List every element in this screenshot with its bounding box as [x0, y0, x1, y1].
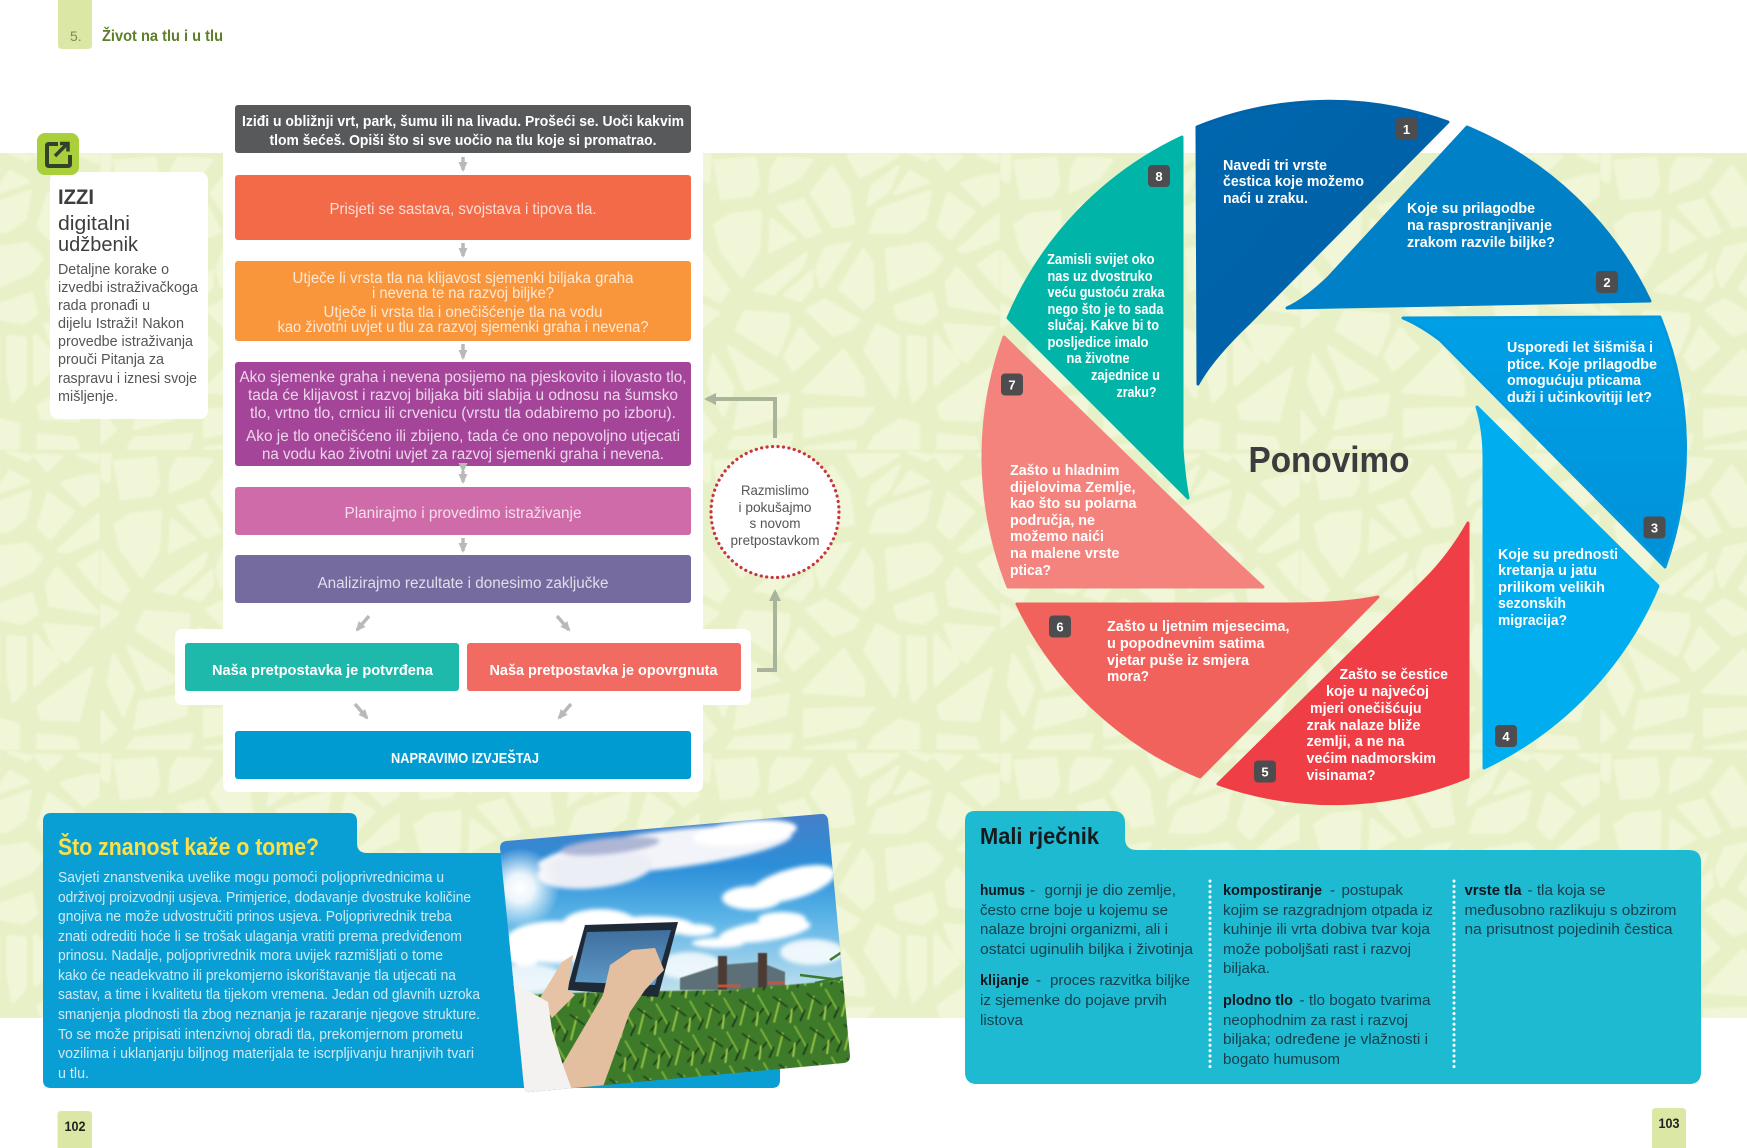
science body text: gnojiva ne može udvostručiti prinos usjeva. Poljoprivrednik treba	[58, 909, 453, 925]
shirt	[514, 982, 572, 1092]
blade 1	[1197, 101, 1448, 384]
question 1: Navedi tri vrste	[1223, 157, 1327, 174]
question 7	[1010, 462, 1137, 579]
question 6	[1107, 618, 1290, 685]
question 7: dijelovima Zemlje,	[1010, 479, 1136, 496]
page number 103	[1652, 1108, 1686, 1148]
question 5: koje u najvećoj	[1326, 683, 1429, 700]
step: hypothesis: Ako sjemenke graha i nevena posijemo na pjeskovito i ilovasto tlo,	[240, 369, 686, 386]
question 7: područja, ne	[1010, 512, 1095, 529]
IZZI body text: mišljenje.	[58, 389, 118, 405]
panel: glossary	[965, 811, 1701, 1084]
IZZI body text: prouči Pitanja za	[58, 352, 165, 368]
science body text: u tlu.	[58, 1066, 89, 1082]
step: questions: i nevena te na razvoj biljke?	[372, 285, 554, 302]
step: questions: Utječe li vrsta tla i onečišćenje tla na vodu	[324, 304, 602, 321]
number badges: 8	[1155, 169, 1163, 184]
question 4: kretanja u jatu	[1498, 562, 1597, 579]
glossary column 1	[980, 882, 1194, 1029]
arrow: from circle back to hypothesis	[707, 399, 775, 438]
IZZI heading: IZZI	[58, 186, 94, 209]
IZZI body text: izvedbi istraživačkoga	[58, 280, 199, 296]
glossary column 1: često crne boje u kojemu se	[980, 902, 1168, 919]
science body text: Savjeti znanstvenika uvelike mogu pomoći poljoprivrednicima u	[58, 870, 444, 886]
step: analyse: Analizirajmo rezultate i donesimo zaključke	[318, 575, 608, 592]
question 7: možemo naići	[1010, 528, 1104, 545]
glossary column 2: može poboljšati rast i razvoj	[1223, 941, 1411, 958]
step: hypothesis: na vodu kao životni uvjet za razvoj sjemenki graha i nevena.	[262, 446, 664, 463]
glossary column 1: nalaze brojni organizmi, ali i	[980, 921, 1168, 938]
question 4: migracija?	[1498, 612, 1567, 629]
science body text: vozilima i uklanjanju biljnog materijala te iscrpljivanju hranjivih tvari	[58, 1046, 474, 1062]
number badges: 6	[1056, 620, 1064, 634]
arrow	[461, 344, 465, 358]
step: questions	[235, 261, 691, 341]
question 7: na malene vrste	[1010, 545, 1120, 562]
arrow: from refuted to circle	[757, 592, 775, 670]
callout: try a new hypothesis: pretpostavkom	[730, 532, 820, 548]
callout: try a new hypothesis: s novom	[750, 515, 800, 531]
question 1: naći u zraku.	[1223, 190, 1308, 207]
question 1: čestica koje možemo	[1223, 173, 1364, 190]
IZZI heading: digitalni	[58, 213, 130, 235]
glossary column 2: bogato humusom	[1223, 1051, 1340, 1068]
step: observe: tlom šećeš. Opiši što si sve uočio na tlu koje si promatrao.	[270, 132, 656, 149]
step: observe	[235, 105, 691, 153]
question 1	[1223, 157, 1364, 207]
diagonal arrows	[355, 616, 571, 718]
grass field	[515, 980, 860, 1098]
question 5: zemlji, a ne na	[1306, 733, 1405, 750]
number badges	[1001, 118, 1666, 782]
glossary column 1: listova	[980, 1012, 1024, 1029]
question 8: posljedice imalo	[1048, 334, 1148, 351]
question 3	[1507, 339, 1657, 406]
step: plan	[235, 487, 691, 535]
question 8: nego što je to sada	[1048, 301, 1164, 318]
page number 102: 102	[64, 1118, 86, 1134]
question 7: kao što su polarna	[1010, 495, 1137, 512]
glossary column 1: ostatci uginulih biljka i životinja	[980, 941, 1194, 958]
icon: external link	[37, 133, 79, 175]
page number 103: 103	[1658, 1115, 1680, 1131]
glossary column 1: proces razvitka biljke	[1050, 972, 1190, 989]
blade 8	[1008, 137, 1188, 498]
number badges: 1	[1403, 122, 1410, 137]
arrow	[461, 243, 465, 256]
science heading: Što znanost kaže o tome?	[58, 833, 319, 861]
IZZI heading: udžbenik	[58, 234, 139, 256]
science body text	[58, 870, 481, 1082]
question 5: visinama?	[1306, 767, 1376, 784]
question 8: slučaj. Kakve bi to	[1048, 317, 1159, 334]
photo: tablet in a field	[500, 814, 850, 1092]
grass blades right	[800, 952, 843, 984]
step: hypothesis	[235, 362, 691, 466]
result: refuted	[467, 643, 741, 691]
question 5	[1306, 666, 1448, 784]
panel: IZZI digital textbook	[37, 133, 208, 419]
glossary column 2: - tlo bogato tvarima	[1300, 992, 1431, 1009]
step: report: NAPRAVIMO IZVJEŠTAJ	[391, 749, 539, 767]
right arm and hand	[558, 948, 664, 1095]
glossary column 2: kojim se razgradnjom otpada iz	[1223, 902, 1433, 919]
question 3: ptice. Koje prilagodbe	[1507, 356, 1657, 373]
question 6: u popodnevnim satima	[1107, 635, 1265, 652]
arrow	[461, 538, 465, 551]
question 8: na životne	[1066, 350, 1130, 367]
clouds	[498, 816, 844, 992]
question 4: Koje su prednosti	[1498, 546, 1618, 563]
glossary column 2	[1223, 882, 1433, 1068]
left hand	[540, 955, 575, 1018]
science body text: sastav, a time i kvalitetu tla tijekom vremena. Jedan od glavnih uzroka	[58, 987, 481, 1003]
science body text: To se može pripisati intenzivnoj obradi tla, prekomjernom prometu	[58, 1027, 463, 1043]
blade 7	[983, 337, 1263, 587]
question 7: ptica?	[1010, 562, 1051, 579]
question 2: Koje su prilagodbe	[1407, 200, 1535, 217]
question 4: sezonskih	[1498, 595, 1566, 612]
IZZI body text: provedbe istraživanja	[58, 334, 194, 350]
number badges: 7	[1008, 378, 1016, 392]
science body text: znati odrediti hoće li se trošak ulaganja vratiti prema predviđenom	[58, 929, 462, 945]
glossary column 1: iz sjemenke do pojave prvih	[980, 992, 1167, 1009]
step: report	[235, 731, 691, 779]
glossary heading: Mali rječnik	[980, 823, 1099, 849]
question 5: zrak nalaze bliže	[1306, 717, 1420, 734]
question 2: zrakom razvile biljke?	[1407, 234, 1555, 251]
IZZI body text: raspravu i iznesi svoje	[58, 371, 197, 387]
question 8	[1047, 251, 1165, 401]
science body text: prinosu. Nadalje, poljoprivrednik mora uvijek razmišljati o tome	[58, 948, 443, 964]
question 6: Zašto u ljetnim mjesecima,	[1107, 618, 1290, 635]
step: hypothesis: Ako je tlo onečišćeno ili zbijeno, tada će ono nepovoljno utjecati	[246, 428, 680, 445]
center heading: Ponovimo	[1248, 439, 1410, 480]
glossary column 2: neophodnim za rast i razvoj	[1223, 1012, 1408, 1029]
IZZI body text: Detaljne korake o	[58, 262, 169, 278]
question 8: zajednice u	[1091, 367, 1160, 384]
background pattern band	[0, 153, 1747, 1018]
science body text: održivoj proizvodnji usjeva. Primjerice, dodavanje dvostruke količine	[58, 890, 471, 906]
sun	[501, 849, 558, 926]
tablet	[567, 922, 678, 997]
science body text: smanjenja plodnosti tla zbog neznanja je razaranje njegove strukture.	[58, 1007, 480, 1023]
step: observe: Iziđi u obližnji vrt, park, šumu ili na livadu. Prošeći se. Uoči kakvim	[242, 113, 684, 130]
blade 2	[1287, 127, 1650, 308]
blade 4	[1477, 407, 1658, 768]
glossary column 2: plodno tlo	[1223, 992, 1293, 1009]
question 3: omogućuju pticama	[1507, 372, 1642, 389]
blade 3	[1403, 317, 1686, 567]
step: recall: Prisjeti se sastava, svojstava i tipova tla.	[330, 201, 596, 218]
glossary column 1: humus	[980, 882, 1025, 899]
result: confirmed	[185, 643, 459, 691]
question 7: Zašto u hladnim	[1010, 462, 1120, 479]
question 8: veću gustoću zraka	[1048, 284, 1165, 301]
question 5: mjeri onečišćuju	[1310, 700, 1422, 717]
IZZI body text: dijelu Istraži! Nakon	[58, 316, 184, 332]
step: hypothesis: tlo, vrtno tlo, crnicu ili crvenicu (vrstu tla odabiremo po izboru).	[250, 405, 676, 422]
arrow	[461, 157, 465, 170]
blade 5	[1218, 523, 1468, 804]
question 6: mora?	[1107, 668, 1149, 685]
question 8: Zamisli svijet oko	[1047, 251, 1154, 268]
number badges: 5	[1261, 764, 1269, 780]
glossary column 1: -	[1030, 882, 1035, 899]
glossary column 1: -	[1036, 972, 1041, 989]
result: refuted: Naša pretpostavka je opovrgnuta	[490, 662, 718, 679]
step: questions: Utječe li vrsta tla na klijavost sjemenki biljaka graha	[292, 270, 634, 287]
question 5: Zašto se čestice	[1340, 666, 1448, 683]
double arrow	[461, 471, 465, 482]
question 4: prilikom velikih	[1498, 579, 1605, 596]
question 2: na rasprostranjivanje	[1407, 217, 1552, 234]
question 6: vjetar puše iz smjera	[1107, 652, 1250, 669]
question 3: Usporedi let šišmiša i	[1507, 339, 1653, 356]
number badges: 4	[1502, 729, 1510, 744]
science body text: kako će neadekvatno ili prekomjerno iskorištavanje tla utjecati na	[58, 968, 457, 984]
panel: flowchart	[175, 105, 751, 792]
IZZI heading	[58, 186, 139, 256]
glossary column 3: vrste tla	[1464, 882, 1522, 899]
glossary column 1: klijanje	[980, 972, 1029, 989]
factory	[680, 953, 785, 990]
question 2	[1407, 200, 1555, 251]
question 8: nas uz dvostruko	[1048, 268, 1152, 285]
step: analyse	[235, 555, 691, 603]
chapter heading tab: Život na tlu i u tlu	[102, 27, 223, 45]
number badges: 3	[1651, 520, 1658, 536]
glossary column 2: -	[1330, 882, 1335, 899]
question 8: zraku?	[1116, 384, 1156, 401]
panel: science says	[43, 813, 780, 1088]
result: confirmed: Naša pretpostavka je potvrđena	[212, 662, 434, 679]
callout: try a new hypothesis: Razmislimo	[741, 482, 809, 498]
glossary column 3: - tla koja se	[1528, 882, 1606, 899]
page number 102	[58, 1111, 92, 1148]
callout: try a new hypothesis	[711, 446, 839, 578]
question 4	[1498, 546, 1618, 629]
glossary column 2: kompostiranje	[1223, 882, 1322, 899]
glossary column 2: biljaka.	[1223, 960, 1270, 977]
IZZI body text: rada pronađi u	[58, 298, 150, 314]
glossary column 3: međusobno razlikuju s obzirom	[1464, 902, 1676, 919]
chapter heading tab: 5.	[70, 28, 82, 44]
chapter heading tab	[58, 0, 223, 49]
glossary column 2: postupak	[1342, 882, 1403, 899]
blade 6	[1017, 597, 1378, 777]
step: plan: Planirajmo i provedimo istraživanje	[344, 505, 582, 522]
question 5: većim nadmorskim	[1306, 750, 1436, 767]
question 3: duži i učinkovitiji let?	[1507, 389, 1652, 406]
glossary column 2: kuhinje ili vrta dobiva tvar koja	[1223, 921, 1431, 938]
glossary column 3	[1464, 882, 1676, 938]
glossary column 1: gornji je dio zemlje,	[1044, 882, 1176, 899]
glossary column 2: biljaka; određene je vlažnosti i	[1223, 1031, 1428, 1048]
step: hypothesis: tada će klijavost i razvoj biljaka biti slabija u odnosu na šumsko	[248, 387, 678, 404]
number badges: 2	[1603, 275, 1611, 290]
step: questions: kao životni uvjet u tlu za razvoj sjemenki graha i nevena?	[278, 319, 649, 336]
callout: try a new hypothesis: i pokušajmo	[738, 499, 812, 515]
IZZI body text	[58, 262, 199, 405]
glossary column 3: na prisutnost pojedinih čestica	[1464, 921, 1673, 938]
step: recall	[235, 175, 691, 240]
